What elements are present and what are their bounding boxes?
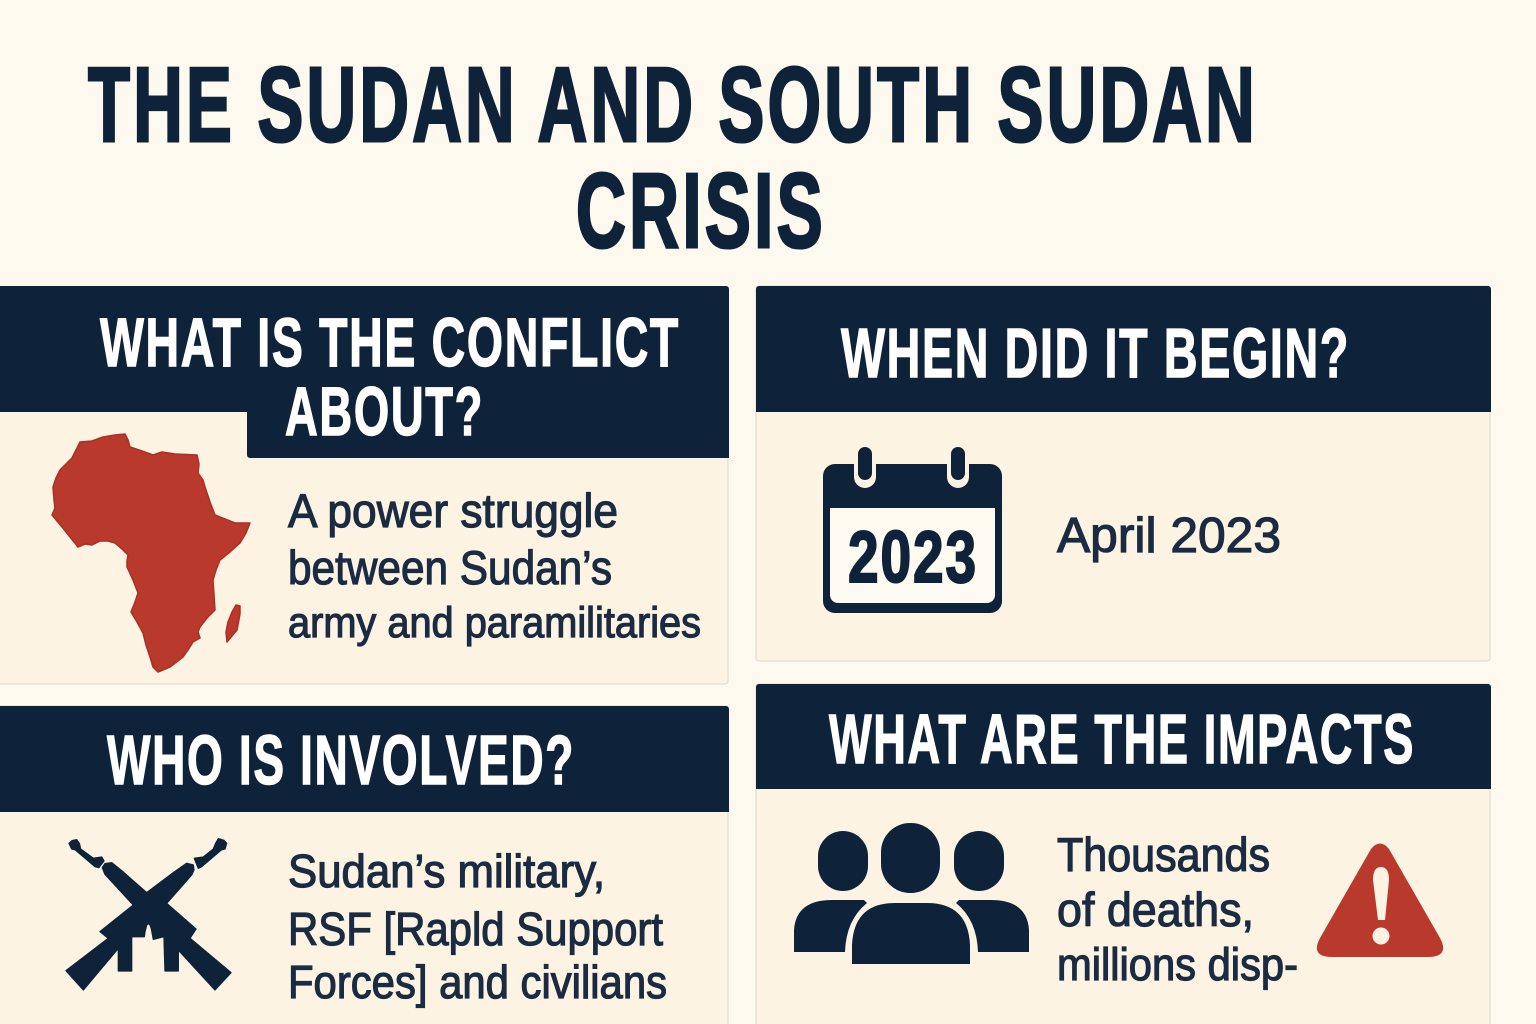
text: impacts description: Thousands [1057,828,1270,881]
panel: when did it begin [756,286,1491,661]
heading: what are the impacts [756,684,1491,789]
text: conflict description: between Sudan’s [288,541,612,594]
icon: group of people [794,823,1029,964]
icon: warning triangle [1317,844,1443,957]
icon: map of Africa [52,434,250,672]
text: impacts description: of deaths, [1057,883,1254,936]
heading: who is involved [0,706,729,812]
text: who is involved description [288,845,667,1008]
text: conflict description [288,484,701,647]
heading: when did it begin [756,286,1491,412]
heading: what is the conflict about: ABOUT? [285,373,484,450]
title [88,46,1258,270]
text: who is involved description: Forces] and civilians [288,956,667,1008]
heading: what is the conflict about: WHAT IS THE CONFLICT [100,304,680,381]
text: conflict description: army and paramilitaries [288,599,701,647]
panel: what is the conflict about [0,286,729,684]
title: CRISIS [576,152,826,270]
text: impacts description [1057,828,1298,990]
panel: what are the impacts [756,684,1491,1024]
icon: crossed rifles [66,839,231,990]
icon: calendar 2023 [823,441,1002,613]
heading: what is the conflict about [0,286,729,458]
icon: calendar 2023: 2023 [848,517,978,598]
text: conflict description: A power struggle [288,484,618,537]
heading: who is involved: WHO IS INVOLVED? [107,721,575,799]
text: who is involved description: Sudan’s military, [288,845,605,897]
panel: who is involved [0,706,729,1024]
text: start date: April 2023 [1057,509,1281,563]
text: impacts description: millions disp- [1057,939,1298,990]
text: who is involved description: RSF [Rapld Support [288,903,663,955]
